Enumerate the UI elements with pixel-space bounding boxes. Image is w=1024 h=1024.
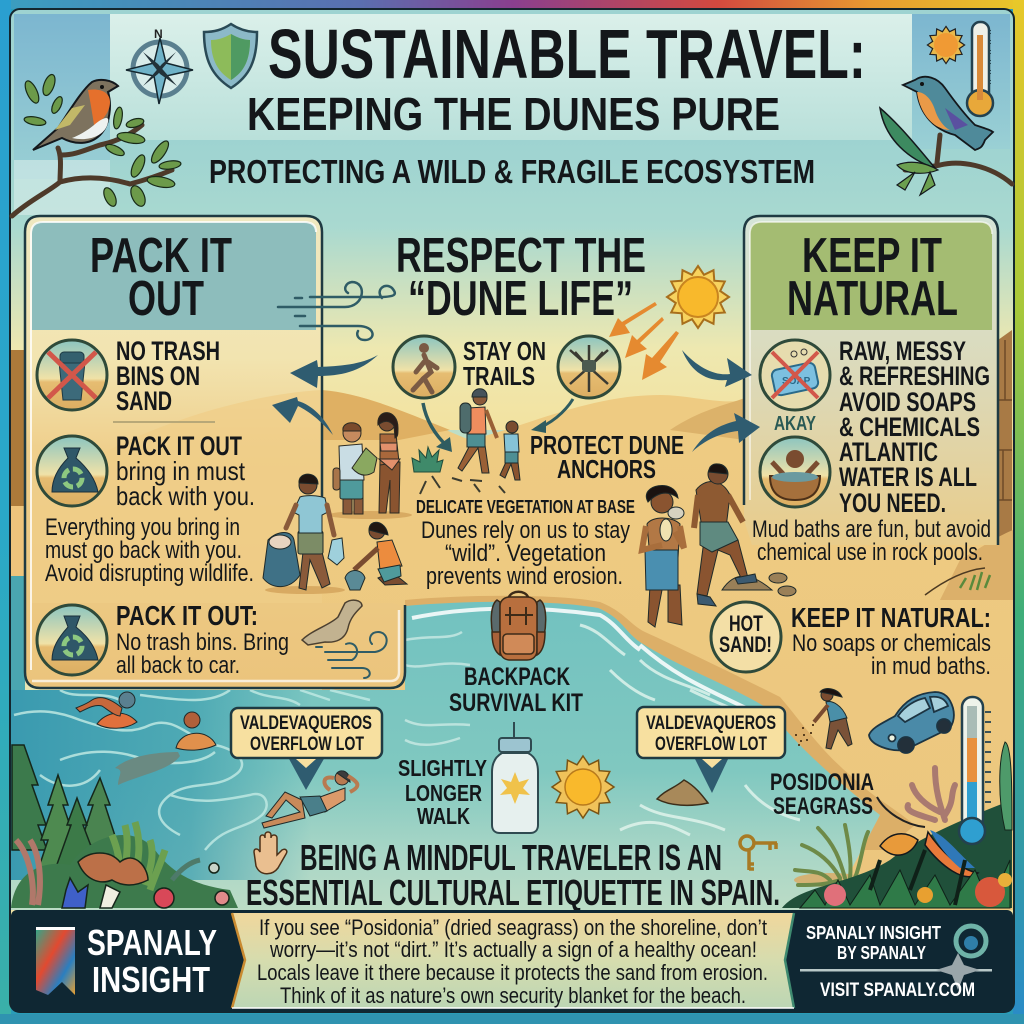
text: stay on trails xyxy=(463,336,546,391)
illustration: blue car xyxy=(869,692,954,753)
text: pack it out bring in: PACK IT OUT xyxy=(116,431,242,461)
panel heading: NATURAL xyxy=(787,272,958,326)
text: mud baths xyxy=(752,516,991,566)
text: delicate vegetation xyxy=(416,497,635,590)
text: posidonia seagrass: POSIDONIA xyxy=(770,769,874,796)
illustration: robin on branch xyxy=(12,73,181,216)
icon: key xyxy=(740,836,777,870)
credit block: VISIT SPANALY.COM xyxy=(820,980,975,1001)
text: backpack survival kit: SURVIVAL KIT xyxy=(449,689,583,717)
panel: pack it out xyxy=(25,216,405,688)
illustration: bluebird on branch xyxy=(880,77,1012,195)
icon: hot sand badge xyxy=(711,602,781,672)
text: raw messy list xyxy=(839,336,990,518)
icon: compass xyxy=(126,27,193,104)
callout: right overflow lot: VALDEVAQUEROS xyxy=(646,713,776,734)
illustration: seagrass tuft xyxy=(794,825,868,887)
credit block xyxy=(800,923,992,1001)
text: slightly longer walk: LONGER xyxy=(405,780,482,806)
illustration: swimmer one xyxy=(76,692,137,728)
text: mindful traveler: ESSENTIAL CULTURAL ETIQUETTE IN SPAIN. xyxy=(246,872,780,913)
text: slightly longer walk: WALK xyxy=(417,803,470,829)
text: pack it out no bins: PACK IT OUT: xyxy=(116,600,258,631)
icon: dune plant xyxy=(412,447,505,494)
illustration: man with sunscreen xyxy=(642,486,684,627)
arrow: right upper xyxy=(682,350,752,387)
callout: left overflow lot: VALDEVAQUEROS xyxy=(240,713,372,734)
text: pack it out no bins xyxy=(116,600,289,679)
pointer: posidonia line xyxy=(877,797,925,827)
heading: respect the dune life xyxy=(396,229,646,326)
text: raw messy list: ATLANTIC xyxy=(839,437,938,467)
text: delicate vegetation: Dunes rely on us to stay xyxy=(421,517,630,544)
text: raw messy list: YOU NEED. xyxy=(839,488,946,518)
icon: shield xyxy=(204,24,257,88)
credit block: BY SPANALY xyxy=(837,943,926,963)
illustration: lying man xyxy=(262,771,357,828)
logo: spanaly insight: SPANALY xyxy=(87,922,217,963)
arrow: right lower xyxy=(692,413,760,452)
panel heading xyxy=(90,229,232,326)
icon: thermometer bottom xyxy=(959,697,991,844)
credit block: SPANALY INSIGHT xyxy=(806,923,941,943)
text: delicate vegetation: DELICATE VEGETATION AT BASE xyxy=(416,497,635,517)
arrow: trail to vegetation xyxy=(423,403,452,452)
icon: grass tuft xyxy=(925,568,990,595)
arrows: orange sun rays xyxy=(609,302,679,380)
text: keep it natural note: in mud baths. xyxy=(871,653,991,680)
callout: left overflow lot xyxy=(231,708,382,790)
arrow: anchors to hikers xyxy=(531,399,573,433)
heading: respect the dune life: RESPECT THE xyxy=(396,229,646,283)
text: raw messy list: RAW, MESSY xyxy=(839,336,966,366)
text: no trash bins: NO TRASH xyxy=(116,336,220,366)
icon: thermometer top xyxy=(967,22,993,116)
text: posidonia seagrass xyxy=(770,769,874,820)
icon: no soap: SOAP xyxy=(782,376,811,387)
text: mindful traveler: BEING A MINDFUL TRAVELER IS AN xyxy=(300,837,722,878)
illustration: crouching woman xyxy=(345,522,407,590)
icon: recycling bag xyxy=(37,436,107,506)
text: pack it out bring in: back with you. xyxy=(116,481,255,511)
text: slightly longer walk: SLIGHTLY xyxy=(398,755,487,781)
callout: right overflow lot: OVERFLOW LOT xyxy=(655,734,767,755)
text: pack it out no bins: No trash bins. Bring xyxy=(116,629,289,656)
arrow: left lower xyxy=(272,397,333,435)
icon: wind lower xyxy=(316,632,387,678)
text: backpack survival kit: BACKPACK xyxy=(464,663,570,691)
icon: wind upper xyxy=(278,282,395,340)
icon: rock on sand xyxy=(657,780,708,805)
icon: backpack xyxy=(491,592,546,660)
text: keep it natural note xyxy=(791,602,991,680)
illustration: man with trash bag xyxy=(263,474,345,594)
text: everything you bring xyxy=(45,514,254,587)
icon: rock and driftwood xyxy=(302,600,362,645)
text: pack it out bring in xyxy=(116,431,255,511)
callout: right overflow lot xyxy=(637,707,785,793)
text: everything you bring: must go back with you. xyxy=(45,537,242,564)
illustration: hiking family xyxy=(458,389,520,480)
text: pack it out bring in: bring in must xyxy=(116,456,246,486)
text: delicate vegetation: “wild”. Vegetation xyxy=(445,540,606,567)
text: protect dune anchors: PROTECT DUNE xyxy=(530,430,684,460)
icon: hot sand badge: HOT xyxy=(729,611,763,636)
caustic water lines xyxy=(14,690,370,850)
icon: recycling bag 2 xyxy=(37,605,107,675)
text: posidonia seagrass: SEAGRASS xyxy=(773,793,873,820)
text: no trash bins xyxy=(116,336,220,416)
text: stay on trails: TRAILS xyxy=(463,361,535,391)
logo: spanaly insight xyxy=(36,922,217,1000)
text: raw messy list: AVOID SOAPS xyxy=(839,387,976,417)
text: slightly longer walk xyxy=(398,755,487,829)
tagline: PROTECTING A WILD & FRAGILE ECOSYSTEM xyxy=(209,153,815,190)
arrow: left upper xyxy=(290,355,378,388)
insight note: Locals leave it there because it protects the sand from erosion. xyxy=(257,960,768,985)
text: stay on trails: STAY ON xyxy=(463,336,546,366)
text: no trash bins: BINS ON xyxy=(116,361,200,391)
insight note: If you see “Posidonia” (dried seagrass) on the shoreline, don’t xyxy=(259,915,767,940)
label: akay: AKAY xyxy=(774,413,816,435)
heading: respect the dune life: “DUNE LIFE” xyxy=(408,272,633,326)
title block xyxy=(209,15,866,190)
icon: large sun xyxy=(667,266,729,328)
text: no trash bins: SAND xyxy=(116,386,172,416)
text: delicate vegetation: prevents wind erosion. xyxy=(426,563,623,590)
insight note: Think of it as nature’s own security blanket for the beach. xyxy=(280,983,746,1008)
icon: stay on trails xyxy=(393,336,455,398)
icon: stop hand xyxy=(254,832,287,874)
illustration: couple with bag xyxy=(328,413,412,519)
icon: no soap xyxy=(760,340,830,410)
icon: small sun xyxy=(927,26,965,64)
text: protect dune anchors: ANCHORS xyxy=(557,454,656,484)
illustration: person scattering sand xyxy=(795,689,852,749)
text: backpack survival kit xyxy=(449,663,583,717)
callout: left overflow lot: OVERFLOW LOT xyxy=(250,734,364,755)
panel heading: KEEP IT xyxy=(802,229,942,283)
illustration: coral and plant mass right xyxy=(782,742,1012,908)
icon: water bottle xyxy=(492,722,538,833)
panel: keep it natural xyxy=(744,216,998,545)
text: protect dune anchors xyxy=(530,430,684,484)
logo: spanaly insight: INSIGHT xyxy=(92,959,210,1000)
illustration: pine trees and flowers left xyxy=(11,745,238,908)
text: raw messy list: & CHEMICALS xyxy=(839,412,980,442)
icon: mud bath xyxy=(760,437,830,507)
icon: no trash bin xyxy=(37,340,107,410)
insight note: worry—it’s not “dirt.” It’s actually a sign of a healthy ocean! xyxy=(269,937,757,962)
illustration: swimmer two xyxy=(115,712,216,785)
text: everything you bring: Everything you bring in xyxy=(45,514,240,541)
insight note xyxy=(232,913,794,1008)
panel heading: OUT xyxy=(128,272,204,326)
icon: dune anchors xyxy=(558,336,620,398)
text: pack it out no bins: all back to car. xyxy=(116,652,240,679)
text: raw messy list: WATER IS ALL xyxy=(839,462,977,492)
subtitle: KEEPING THE DUNES PURE xyxy=(247,88,780,140)
text: mindful traveler xyxy=(246,837,780,913)
footer bar xyxy=(11,910,1013,1012)
illustration: man stepping on rock xyxy=(694,464,796,606)
panel heading xyxy=(787,229,958,326)
icon: bottom sun xyxy=(552,756,614,818)
icon: compass: N xyxy=(154,27,163,41)
text: everything you bring: Avoid disrupting wildlife. xyxy=(45,560,254,587)
icon: hot sand badge: SAND! xyxy=(719,632,772,657)
panel heading: PACK IT xyxy=(90,229,232,283)
